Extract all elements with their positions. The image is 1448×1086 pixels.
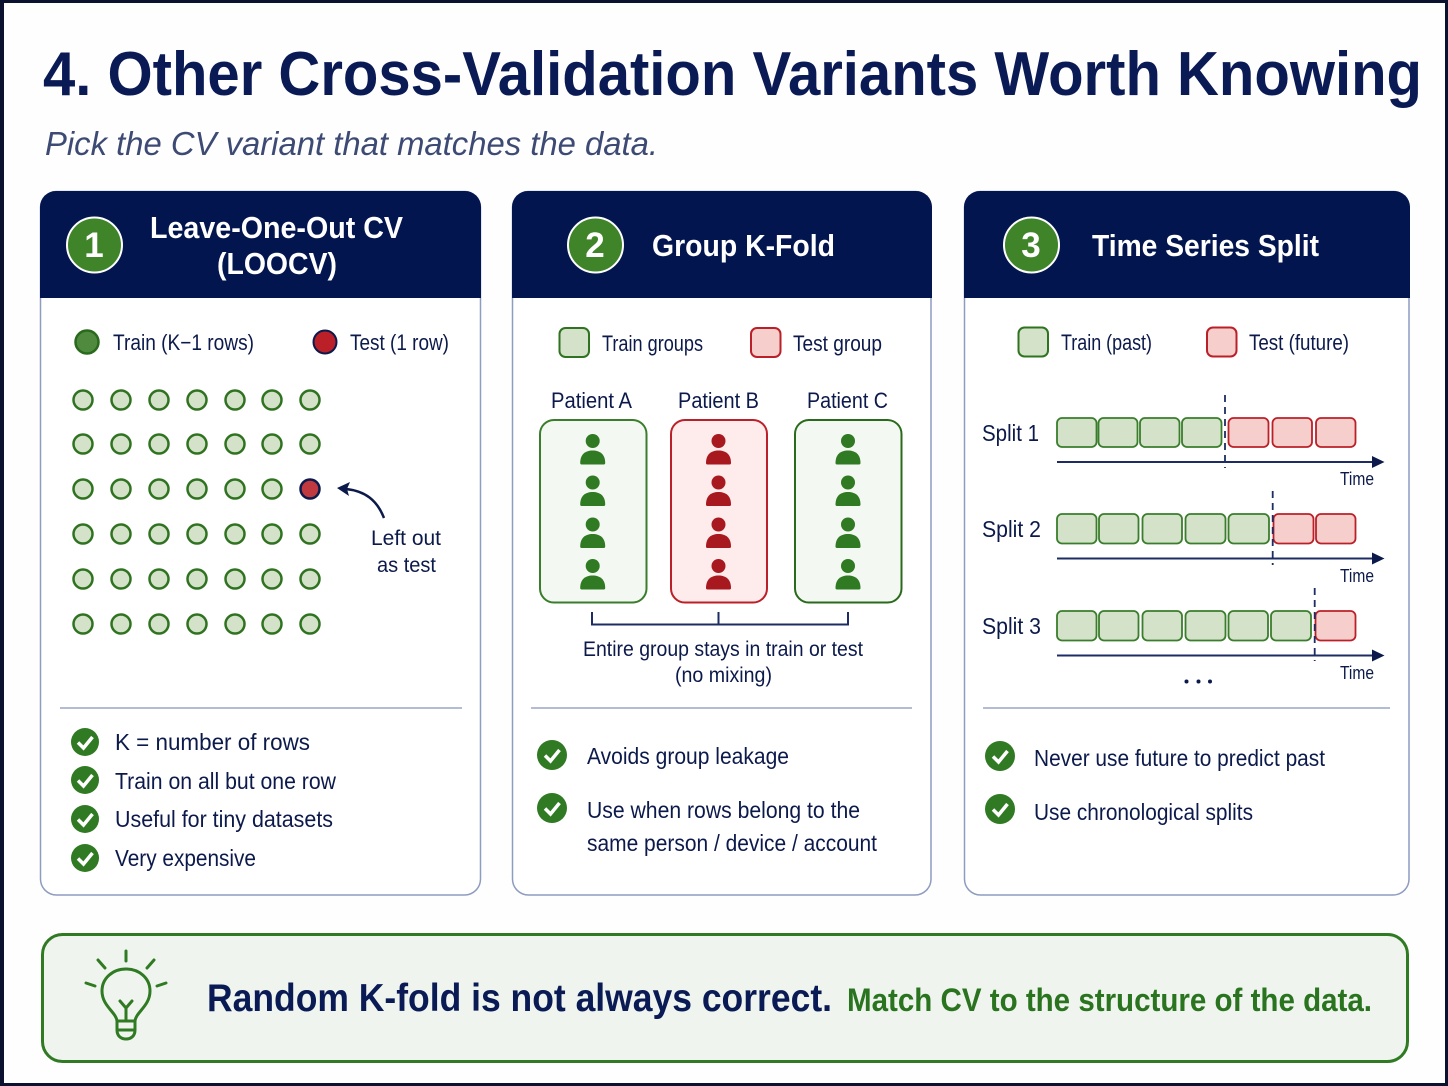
subtitle: Pick the CV variant that matches the data. (45, 125, 658, 162)
panel 2 header (512, 191, 932, 298)
chart: split 1 (982, 395, 1384, 489)
panel 1 header (40, 191, 481, 298)
group: Patient C (795, 388, 902, 602)
legend: train and test rows: Test (1 row) (350, 330, 449, 355)
checklist for Time Series Split: Never use future to predict past (1034, 745, 1326, 771)
panel 1 heading: (LOOCV) (217, 246, 337, 281)
left out annotation: as test (377, 554, 436, 577)
callout (42, 934, 1408, 1062)
group: Patient B: Patient B (678, 388, 759, 413)
legend: past and future (1018, 328, 1349, 356)
panel: Leave-One-Out CV (40, 191, 481, 895)
chart: split 1: Time (1340, 469, 1374, 489)
left out annotation (371, 527, 441, 577)
panel 3 heading: Time Series Split (1092, 228, 1319, 263)
group note (583, 638, 863, 687)
checklist for Group K-Fold (537, 740, 878, 856)
continuation dots (1184, 680, 1212, 684)
legend: past and future: Test (future) (1249, 330, 1349, 355)
chart: split 3: Time (1340, 663, 1374, 683)
legend: train and test rows (76, 330, 449, 355)
dot grid of rows (74, 390, 320, 634)
number badge 2 (568, 218, 623, 272)
panel: Time Series Split (964, 191, 1410, 895)
checklist for Group K-Fold: same person / device / account (587, 830, 878, 856)
group: Patient A: Patient A (551, 388, 632, 413)
arrow to left-out row (337, 482, 384, 518)
checklist for LOOCV: Useful for tiny datasets (115, 806, 333, 832)
legend: train and test groups: Test group (793, 331, 882, 356)
chart: split 2 (982, 491, 1384, 586)
callout message: Match CV to the structure of the data. (847, 982, 1372, 1018)
group note: (no mixing) (675, 664, 772, 687)
chart: split 2: Time (1340, 566, 1374, 586)
chart: split 1: Split 1 (982, 420, 1039, 446)
callout message: Random K-fold is not always correct. (207, 977, 832, 1020)
chart: split 3: Split 3 (982, 613, 1041, 639)
number badge 2: 2 (585, 226, 605, 265)
legend: train and test rows: Train (K−1 rows) (113, 330, 254, 355)
icon: light bulb (86, 951, 166, 1039)
panel 1 heading: Leave-One-Out CV (150, 210, 403, 245)
checklist for Group K-Fold: Use when rows belong to the (587, 797, 860, 823)
panel 3 header (964, 191, 1410, 298)
callout message (207, 977, 1372, 1020)
bracket across groups (592, 612, 848, 624)
number badge 1 (67, 218, 122, 272)
number badge 3: 3 (1021, 226, 1041, 265)
panel 2 heading: Group K-Fold (652, 228, 835, 263)
group: Patient B (671, 388, 767, 602)
group: Patient C: Patient C (807, 388, 888, 413)
checklist for Time Series Split: Use chronological splits (1034, 799, 1253, 825)
checklist for LOOCV (71, 728, 336, 872)
chart: split 3 (982, 588, 1384, 683)
group note: Entire group stays in train or test (583, 638, 863, 661)
legend: train and test groups (560, 328, 882, 357)
left out annotation: Left out (371, 527, 441, 550)
checklist for Group K-Fold: Avoids group leakage (587, 743, 789, 769)
checklist for LOOCV: K = number of rows (115, 729, 310, 755)
checklist for Time Series Split (985, 741, 1326, 825)
checklist for LOOCV: Train on all but one row (115, 768, 336, 794)
legend: past and future: Train (past) (1061, 330, 1152, 355)
checklist for LOOCV: Very expensive (115, 845, 256, 871)
panel 1 heading (150, 210, 403, 281)
panel: Group K-Fold (512, 191, 932, 895)
chart: split 2: Split 2 (982, 516, 1041, 542)
number badge 1: 1 (84, 226, 104, 265)
group: Patient A (540, 388, 646, 602)
number badge 3 (1004, 218, 1059, 272)
legend: train and test groups: Train groups (602, 331, 703, 356)
